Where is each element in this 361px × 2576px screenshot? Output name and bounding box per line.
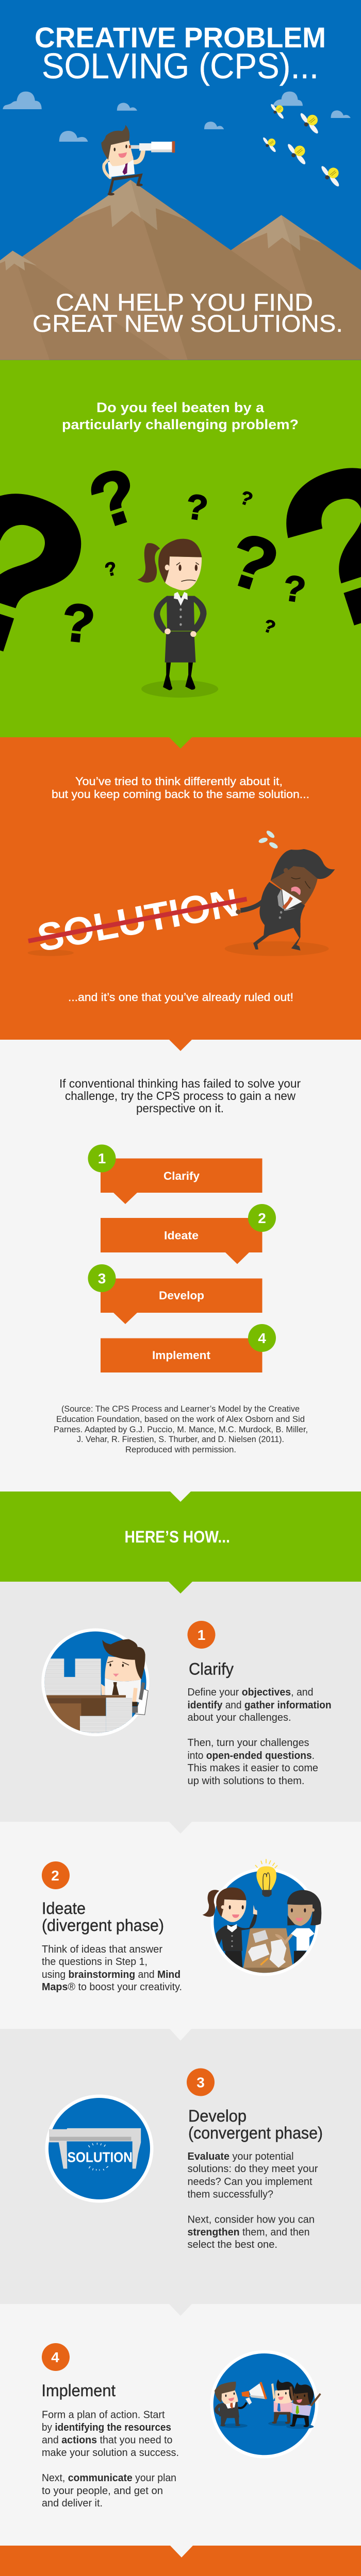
step box: ideate: 2 — [258, 1210, 266, 1226]
number badge — [188, 1621, 216, 1649]
mountains — [0, 180, 361, 360]
subtitle: GREAT NEW SOLUTIONS. — [32, 310, 343, 337]
heading: Do you feel beaten by a — [96, 400, 265, 415]
source note: J. Vehar, R. Firestien, S. Thurber, and D. Nielsen (2011). — [77, 1434, 284, 1444]
pointer — [169, 737, 192, 749]
question marks — [0, 414, 361, 709]
body text: Form a plan of action. Start — [42, 2409, 165, 2420]
source note: Parnes. Adapted by G.J. Puccio, M. Mance, M.C. Murdock, B. Miller, — [54, 1425, 308, 1434]
number badge — [42, 2343, 70, 2371]
step box: clarify: Clarify — [163, 1170, 200, 1182]
body text: them successfully? — [188, 2189, 273, 2200]
body text: Maps® to boost your creativity. — [42, 1981, 182, 1993]
body text: strengthen them, and then — [188, 2227, 309, 2238]
step box: ideate — [101, 1204, 276, 1264]
source note: (Source: The CPS Process and Learner’s Model by the Creative — [61, 1404, 300, 1414]
panel: hero — [0, 0, 361, 360]
intro text: challenge, try the CPS process to gain a new — [65, 1089, 296, 1103]
body text: up with solutions to them. — [188, 1775, 304, 1787]
subtitle: CAN HELP YOU FIND — [56, 289, 313, 316]
number badge: 4 — [51, 2349, 59, 2365]
step box: implement — [101, 1324, 276, 1372]
body text: This makes it easier to come — [188, 1762, 318, 1774]
body text — [188, 1687, 331, 1787]
intro text: If conventional thinking has failed to solve your — [59, 1077, 301, 1090]
illustration: man behind paper stacks — [41, 1629, 150, 1738]
icon: tired man dragging the word solution — [28, 829, 335, 960]
intro text: You’ve tried to think differently about it, — [75, 775, 283, 788]
subtitle — [32, 289, 343, 337]
body text: Define your objectives, and — [188, 1687, 314, 1698]
icon: man with telescope — [101, 125, 175, 195]
heading: Ideate — [42, 1899, 86, 1918]
panel: here's how — [0, 1492, 361, 1582]
body text: Evaluate your potential — [188, 2151, 294, 2162]
heading: (divergent phase) — [42, 1916, 164, 1935]
number badge — [42, 1861, 70, 1889]
intro text: but you keep coming back to the same solution... — [52, 788, 309, 801]
pointer — [170, 2546, 193, 2557]
source note: Education Foundation, based on the work of Alex Osborn and Sid — [56, 1414, 305, 1424]
body text: Think of ideas that answer — [42, 1944, 162, 1955]
source note: Reproduced with permission. — [125, 1445, 236, 1454]
body text: about your challenges. — [188, 1712, 291, 1723]
question marks: ? — [79, 451, 149, 545]
heading — [42, 1899, 164, 1935]
panel: step 4 implement — [0, 2304, 361, 2546]
body text — [42, 1944, 182, 1993]
number badge: 1 — [198, 1627, 205, 1643]
illustration: caliper measuring solution: SOLUTION — [67, 2149, 133, 2165]
source note — [54, 1404, 308, 1454]
title — [35, 21, 326, 86]
body text: identify and gather information — [188, 1700, 331, 1711]
body text — [42, 2409, 179, 2509]
body text: Then, turn your challenges — [188, 1737, 309, 1749]
question marks: ? — [261, 615, 278, 638]
question marks: ? — [59, 592, 97, 654]
heading — [62, 400, 299, 432]
step box: implement: 4 — [258, 1330, 266, 1346]
heading: Develop — [188, 2107, 247, 2125]
icon: flying light bulbs — [262, 104, 340, 188]
illustration: manager with megaphone and team — [210, 2350, 321, 2459]
panel: same solution — [0, 737, 361, 1040]
title: CREATIVE PROBLEM — [35, 21, 326, 54]
panel: step 2 ideate — [42, 1822, 322, 1992]
body text — [188, 2151, 318, 2250]
outro text: ...and it’s one that you’ve already ruled out! — [68, 991, 293, 1004]
title: SOLVING (CPS)... — [42, 46, 319, 86]
panel: challenging problem — [0, 360, 361, 737]
illustration: caliper measuring solution — [45, 2095, 154, 2203]
step box: clarify: 1 — [98, 1150, 106, 1166]
body text: using brainstorming and Mind — [42, 1969, 180, 1980]
body text: make your solution a success. — [42, 2447, 179, 2459]
step box: implement: Implement — [152, 1349, 211, 1362]
step box: develop: Develop — [159, 1289, 204, 1302]
step box: develop: 3 — [98, 1270, 106, 1286]
pointer — [170, 2029, 191, 2041]
icon: worried woman — [138, 539, 218, 698]
pointer — [169, 2304, 192, 2316]
heading: (convergent phase) — [188, 2124, 323, 2142]
number badge: 3 — [196, 2074, 205, 2091]
body text: and actions that you need to — [42, 2435, 172, 2446]
intro text — [52, 775, 309, 801]
intro text: perspective on it. — [136, 1101, 224, 1115]
question marks: ? — [281, 567, 308, 611]
body text: Next, communicate your plan — [42, 2472, 176, 2484]
pointer — [169, 1040, 192, 1051]
step box: ideate: Ideate — [164, 1229, 199, 1242]
clouds — [3, 92, 351, 142]
question marks: ? — [237, 486, 255, 511]
body text: needs? Can you implement — [188, 2176, 313, 2188]
panel: step 3 develop — [0, 2029, 361, 2304]
step box: clarify — [88, 1145, 262, 1204]
body text: solutions: do they meet your — [188, 2163, 318, 2175]
step box: develop — [88, 1264, 262, 1324]
heading: particularly challenging problem? — [62, 417, 299, 432]
illustration: team with idea bulb — [203, 1859, 321, 1976]
body text: to your people, and get on — [42, 2485, 163, 2497]
body text: by identifying the resources — [42, 2422, 171, 2433]
body text: and deliver it. — [42, 2498, 103, 2509]
body text: the questions in Step 1, — [42, 1956, 147, 1968]
question marks: ? — [103, 557, 119, 581]
question marks: ? — [219, 517, 287, 609]
icon: tired man dragging the word solution: SOLUTION — [34, 880, 242, 960]
pointer — [170, 1492, 191, 1502]
pointer — [169, 1582, 192, 1594]
body text: Next, consider how you can — [188, 2214, 315, 2226]
heading: Implement — [41, 2381, 116, 2400]
body text: into open-ended questions. — [188, 1750, 315, 1761]
intro text — [59, 1077, 301, 1115]
heading: Clarify — [189, 1660, 234, 1679]
panel: closing advice — [0, 2546, 361, 2576]
panel: step 1 clarify — [0, 1582, 361, 1822]
panel: CPS process — [0, 1040, 361, 1492]
heading — [188, 2107, 323, 2142]
heading: HERE’S HOW... — [125, 1528, 230, 1546]
question marks: ? — [184, 486, 210, 529]
number badge: 2 — [51, 1868, 59, 1884]
pointer — [169, 1822, 192, 1834]
number badge — [187, 2068, 215, 2096]
body text: select the best one. — [188, 2239, 277, 2250]
